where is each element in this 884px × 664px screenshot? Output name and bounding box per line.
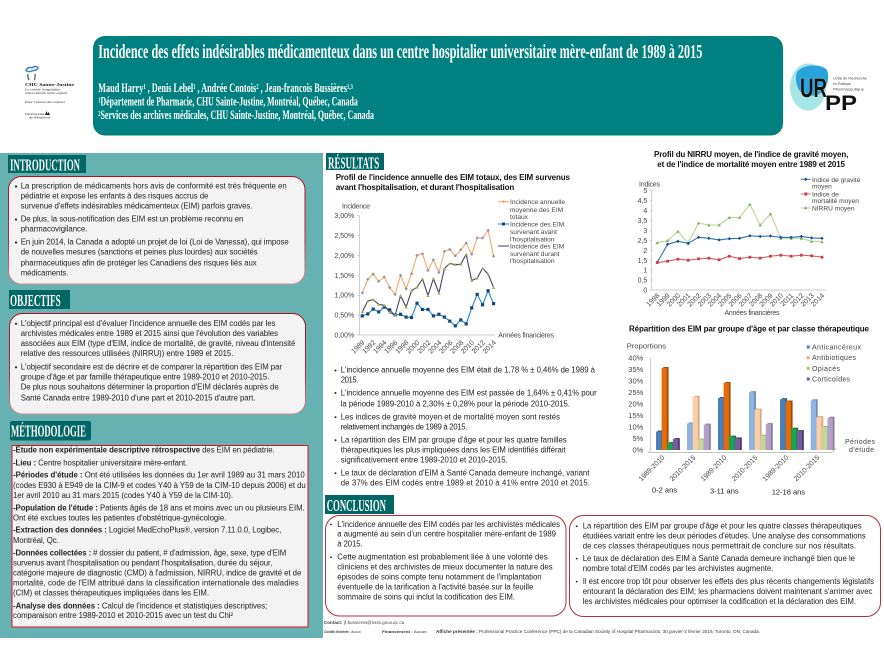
box: introduction text: La prescription de médicaments hors avis de conformité est très fréquente en — [21, 182, 287, 191]
axes and ticks: 2012 — [790, 292, 806, 308]
box: objectifs text: Santé Canada entre 1989-2010 d'une part et 2010-2015 d'autre part. — [21, 393, 255, 402]
axes and ticks: 2014 — [482, 339, 498, 355]
axes and ticks — [334, 204, 554, 355]
axes and ticks: 0% — [632, 446, 644, 455]
legend: survenant avant — [510, 229, 557, 236]
box: méthodologie text: -Lieu : Centre hospitalier universitaire mère-enfant. — [13, 459, 187, 468]
x axis period labels: 2010-2015 — [731, 454, 759, 483]
box: conclusion right: de ces classes thérapeutiques nous permettrait de conclure sur nos résultats. — [583, 542, 856, 551]
axes and ticks: 2004 — [427, 339, 443, 355]
legend: moyenne des EIM — [510, 207, 563, 214]
box: conclusion right: Le taux de déclaration des EIM à Santé Canada demeure inchangé bien que le — [583, 554, 855, 563]
axes and ticks: 2001 — [676, 292, 692, 308]
résultats bullet list: thérapeutiques les plus impliquées dans les EIM identifiés différait — [341, 446, 567, 455]
x axis period labels: 1989-2010 — [762, 454, 790, 483]
axes and ticks: 3 — [643, 228, 647, 235]
axes and ticks: 2,00% — [334, 253, 354, 260]
axes and ticks: 35% — [628, 365, 644, 374]
axes and ticks: 3,00% — [334, 213, 354, 220]
box: introduction text — [8, 176, 305, 284]
age group labels: 3-11 ans — [710, 486, 739, 496]
axes and ticks: 5% — [632, 434, 644, 443]
x axis period labels: 2010-2015 — [793, 454, 821, 483]
axes and ticks: 0,50% — [334, 313, 354, 320]
résultats bullet list: 2015. — [341, 376, 358, 385]
box: introduction text: pharmacovigilance. — [21, 225, 87, 234]
box: méthodologie text: Ont été exclues toutes les patientes d'obstétrique-gynécologie. — [13, 514, 226, 523]
bars: 12-18 ans 2010-2015 — [811, 399, 834, 450]
x axis period labels: 1989-2010 — [700, 454, 728, 483]
axes and ticks: 2005 — [717, 292, 733, 308]
heading: introduction: INTRODUCTION — [10, 156, 80, 175]
box: conclusion right: Il est encore trop tôt pour observer les effets des plus récents changements législatifs — [583, 577, 874, 586]
axes and ticks: Années financières — [498, 332, 554, 340]
logo: URPP — [790, 64, 867, 115]
axes and ticks — [638, 182, 826, 317]
authors and affiliations: Services des archives médicales, CHU Sainte-Justine, Montréal, Québec, Canada — [101, 108, 374, 122]
legend: l'hospitalisation — [510, 258, 555, 265]
axes and ticks: 5 — [643, 188, 647, 195]
box: conclusion left: épisodes de soins compte tenu notamment de l'implantation — [337, 573, 542, 582]
axes and ticks: 0,5 — [638, 278, 647, 284]
box: méthodologie text: -Population de l'étude : Patients âgés de 18 ans et moins avec un ou plusieurs EIM. — [13, 504, 305, 513]
axes and ticks: 15% — [628, 411, 644, 420]
logo: CHU Sainte-Justine: Pour l'amour des enfants — [24, 100, 66, 104]
panel: introduction — [8, 155, 305, 284]
résultats bullet list: Les indices de gravité moyen et de mortalité moyen sont restés — [341, 413, 560, 422]
legend: Indice de gravité — [812, 177, 861, 184]
authors and affiliations: Département de Pharmacie, CHU Sainte-Justine, Montréal, Québec, Canada — [100, 94, 358, 108]
chart: NIRRU, gravité, mortalité — [638, 150, 861, 317]
axes and ticks: 2009 — [759, 292, 775, 308]
box: conclusion left — [326, 516, 566, 616]
axes and ticks: 0,00% — [334, 332, 354, 340]
left column background — [0, 153, 323, 638]
line: incidence totale — [362, 230, 494, 294]
panel: méthodologie — [10, 421, 308, 627]
logo: URPP: Unité de Recherche — [833, 76, 867, 80]
box: introduction text: de nouvelles mesures (sanctions et peines plus lourdes) aux sociétés — [21, 248, 258, 257]
axes and ticks: 1996 — [383, 339, 399, 355]
box: conclusion right: La répartition des EIM par groupe d'âge et pour les quatre classes thérapeutiques — [583, 522, 862, 531]
logo: CHU Sainte-Justine: Université — [25, 112, 45, 116]
box: méthodologie text: -Périodes d'étude : Ont été utilisées les données du 1er avril 1989 au 31 mars 2010 — [13, 471, 305, 480]
box: conclusion right: nombre total d'EIM codés par les archivistes augmente. — [583, 564, 773, 573]
logo: CHU Sainte-Justine: Le centre hospitalier — [24, 88, 62, 92]
footer: contact and disclosures — [324, 620, 760, 634]
résultats bullet list — [334, 366, 597, 488]
axes and ticks: 20% — [628, 400, 644, 408]
legend: Indice de — [812, 192, 839, 198]
résultats bullet list: La répartition des EIM par groupe d'âge et pour les quatre familles — [341, 436, 567, 445]
bars: 3-11 ans 2010-2015 — [749, 391, 773, 450]
axes and ticks: 1994 — [372, 339, 388, 355]
axes and ticks: Indices — [639, 182, 660, 188]
axes and ticks: 2003 — [697, 292, 713, 308]
legend: survenant durant — [510, 251, 560, 258]
panel: objectifs — [9, 290, 306, 414]
authors and affiliations: 1 — [193, 83, 196, 91]
box: objectifs text: relative des ressources utilisées (NIRRU)) entre 1989 et 2015. — [21, 349, 233, 358]
axes and ticks: 2010 — [769, 292, 785, 308]
legend: Corticoïdes — [812, 376, 850, 384]
authors and affiliations — [98, 81, 374, 122]
box: introduction text: pharmaceutiques afin de protéger les Canadiens des risques liés aux — [21, 259, 257, 268]
box: conclusion right — [570, 516, 880, 616]
age group labels: 0-2 ans — [652, 486, 677, 494]
heading: objectifs: OBJECTIFS — [10, 291, 61, 310]
legend: Opiacés — [812, 366, 840, 373]
axes and ticks: 1989 — [350, 339, 366, 355]
footer: contact and disclosures: Contact: jf.bussieres@ssss.gouv.qc.ca — [324, 620, 405, 625]
legend: Antibiotiques — [812, 355, 856, 362]
box: conclusion left: Cette augmentation est probablement liée à une volonté des — [337, 553, 548, 562]
box: objectifs text: archivistes médicales entre 1989 et 2015 ainsi que l'évolution des variables — [21, 329, 278, 338]
line: indice de gravité moyen — [657, 236, 822, 262]
résultats bullet list: L'incidence annuelle moyenne des EIM est passée de 1,64% ± 0,41% pour — [341, 388, 597, 397]
line: indice de mortalité moyen — [657, 255, 822, 263]
box: conclusion left: éventuelle de la tarification à l'activité basée sur la feuille — [337, 583, 533, 592]
heading: conclusion — [325, 495, 394, 515]
legend: Anticancéreux — [812, 344, 862, 352]
logo: CHU Sainte-Justine: de Montréal — [29, 116, 50, 120]
chart title: Répartition des EIM par groupe d'âge et par classe thérapeutique — [629, 324, 870, 334]
logo: CHU Sainte-Justine: CHU Sainte-Justine — [25, 82, 74, 87]
axes and ticks: 2,5 — [638, 238, 647, 245]
axes and ticks: 2 — [643, 248, 647, 255]
box: objectifs text: groupe d'âge et par famille thérapeutique entre 1989-2010 et 2010-2015. — [21, 373, 269, 382]
box: méthodologie text: -Données collectées : # dossier du patient, # d'admission, âge, sexe, type d'EIM — [13, 549, 286, 558]
box: objectifs text — [10, 314, 306, 414]
logo: URPP: PP — [825, 92, 857, 115]
axes and ticks: 10% — [628, 423, 644, 432]
axes and ticks: 1,00% — [334, 293, 354, 300]
bars: 12-18 ans 1989-2010 — [780, 398, 804, 450]
axes and ticks: 4 — [643, 208, 647, 215]
legend — [801, 177, 861, 212]
axes and ticks: 2014 — [810, 292, 826, 308]
authors and affiliations: 1 — [143, 83, 146, 91]
résultats bullet list: L'incidence annuelle moyenne des EIM était de 1,78 % ± 0,46% de 1989 à — [341, 366, 596, 375]
axes and ticks: 1992 — [361, 339, 377, 355]
box: objectifs text: De plus nous souhaitons déterminer la proportion d'EIM déclarés auprès de — [21, 383, 279, 392]
legend: Incidence des EIM — [510, 244, 564, 250]
heading: méthodologie: MÉTHODOLOGIE — [11, 422, 86, 441]
authors and affiliations: 2 — [98, 110, 101, 118]
line: incidence durant hospitalisation — [362, 254, 494, 315]
axes and ticks: 1998 — [645, 292, 661, 308]
box: méthodologie text: -Analyse des données : Calcul de l'incidence et statistiques descriptives; — [13, 602, 267, 611]
axes and ticks: 2002 — [416, 339, 432, 355]
footer: contact and disclosures: Conflit d'intérêt : Aucun — [324, 630, 361, 634]
bars: 0-2 ans 1989-2010 — [656, 367, 680, 450]
axes and ticks: 2004 — [707, 292, 723, 308]
box: conclusion left: sommaire de soins qui inclut la codification des EIM. — [337, 593, 515, 602]
footer: contact and disclosures: Financement : Aucun — [382, 630, 427, 634]
footer: contact and disclosures: Affiche présentée : Professional Practice Conference (PPC) de la Canadian Society of Hospital Pharmacists, 30 janvier-3 février 2016, Toronto, ON, Canada. — [436, 629, 760, 634]
box: méthodologie text: (codes E930 à E949 de la CIM-9 et codes Y40 à Y59 de la CIM-10 depuis 2006) et du — [13, 481, 306, 490]
box: introduction text: pédiatrie et expose les enfants à des risques accrus de — [21, 192, 208, 201]
axes and ticks — [627, 342, 837, 455]
box: conclusion right: les archivistes médicales pour optimiser la codification et la déclaration des EIM. — [583, 597, 856, 606]
box: introduction text: De plus, la sous-notification des EIM est un problème reconnu en — [21, 215, 243, 224]
axes and ticks: 4,5 — [638, 198, 647, 205]
axes and ticks: 1998 — [394, 339, 410, 355]
axes and ticks: 1,50% — [334, 273, 354, 280]
authors and affiliations: 2 — [256, 83, 259, 91]
résultats bullet list: significativement entre 1989-2010 et 2010-2015. — [341, 456, 508, 465]
heading: résultats: RÉSULTATS — [328, 153, 379, 172]
chart: répartition par âge et classe thérapeutique — [627, 324, 876, 496]
heading: introduction — [8, 155, 86, 175]
legend: mortalité moyen — [812, 198, 859, 205]
box: introduction text: médicaments. — [21, 269, 68, 278]
box: objectifs text: associées aux EIM (type d'EIM, indice de mortalité, de gravité, niveau d'intensité — [21, 339, 295, 348]
box: conclusion left: à 2015. — [337, 540, 363, 549]
axes and ticks: 2006 — [728, 292, 744, 308]
axes and ticks: 30% — [628, 376, 644, 385]
age group labels — [652, 486, 805, 496]
box: objectifs text: L'objectif principal est d'évaluer l'incidence annuelle des EIM codés par les — [21, 319, 275, 328]
axes and ticks: 1 — [643, 268, 647, 275]
box: méthodologie text — [12, 446, 308, 627]
axes and ticks: Incidence — [342, 204, 370, 210]
axes and ticks: 2,50% — [334, 233, 354, 240]
line: incidence avant hospitalisation — [362, 291, 494, 326]
authors and affiliations: 1,3 — [347, 83, 353, 91]
legend — [498, 199, 565, 265]
chart: incidence annuelle — [334, 173, 571, 355]
legend: NIRRU moyen — [812, 206, 855, 212]
axes and ticks: 2007 — [738, 292, 754, 308]
legend — [807, 344, 862, 384]
axes and ticks: 2013 — [800, 292, 816, 308]
authors and affiliations: 1 — [98, 96, 101, 104]
legend: Incidence annuelle — [510, 199, 565, 206]
authors and affiliations: , Andrée Contois — [195, 81, 256, 95]
line: NIRRU moyen — [657, 204, 822, 243]
authors and affiliations: , Jean-francois Bussières — [259, 81, 347, 95]
bars: 3-11 ans 1989-2010 — [718, 382, 742, 450]
age group labels: 12-18 ans — [772, 488, 805, 496]
axes and ticks: 2000 — [666, 292, 682, 308]
axes and ticks: 25% — [628, 388, 644, 397]
résultats bullet list: la période 1989-2010 à 2,30% ± 0,28% pour la période 2010-2015. — [341, 400, 570, 409]
authors and affiliations: Maud Harry — [98, 81, 167, 95]
logo: URPP: en Pratique — [833, 82, 851, 86]
box: méthodologie text: mortalité, code de l'EIM attribué dans la classification internationale des maladies — [13, 579, 299, 588]
axes and ticks: Années financières — [724, 310, 780, 317]
axes and ticks: 2006 — [438, 339, 454, 355]
axes and ticks: 0 — [643, 288, 647, 294]
box: méthodologie text: (CIM) et classes thérapeutiques impliquées dans les EIM. — [13, 589, 209, 598]
axes and ticks: Proportions — [627, 342, 666, 350]
logo: CHU Sainte-Justine — [24, 66, 74, 120]
axis label: périodes d'étude: Périodes — [845, 439, 876, 446]
box: conclusion right: entourant la déclaration des EIM; les pharmaciens doivent maintenant s'arrimer avec — [583, 587, 872, 596]
résultats bullet list: relativement inchangés de 1989 à 2015. — [341, 422, 467, 431]
authors and affiliations: , Denis Lebel — [146, 81, 193, 95]
box: méthodologie text: -Extraction des données : Logiciel MedEchoPlus®, version 7.11.0.0, Logibec, — [13, 526, 281, 535]
box: méthodologie text: 1er avril 2010 au 31 mars 2015 (codes Y40 à Y59 de la CIM-10). — [13, 491, 233, 500]
legend: Incidence des EIM — [510, 222, 564, 228]
box: conclusion left: a augmenté au sein d'un centre hospitalier mère-enfant de 1989 — [337, 530, 556, 539]
bars: 0-2 ans 2010-2015 — [687, 396, 711, 450]
axes and ticks: 2000 — [405, 339, 421, 355]
chart title: avant l'hospitalisation, et durant l'hospitalisation — [336, 183, 514, 192]
axes and ticks: 2002 — [687, 292, 703, 308]
chart title: Profil du NIRRU moyen, de l'indice de gravité moyen, — [654, 150, 848, 159]
x axis period labels: 1989-2010 — [638, 454, 666, 483]
chart title: Profil de l'incidence annuelle des EIM totaux, des EIM survenus — [336, 173, 571, 182]
box: objectifs text: L'objectif secondaire est de décrire et de comparer la répartition des EIM par — [21, 363, 282, 372]
heading: résultats — [326, 153, 384, 172]
résultats bullet list: de 37% des EIM codés entre 1989 et 2010 à 41% entre 2010 et 2015. — [341, 479, 590, 488]
logo: CHU Sainte-Justine: universitaire mère-enfant — [25, 91, 68, 95]
legend: totaux — [510, 214, 529, 221]
logo: URPP: Pharmaceutique — [833, 88, 864, 92]
x axis period labels — [638, 454, 821, 483]
panel: conclusion — [325, 495, 880, 616]
box: méthodologie text: comparaison entre 1989-2010 et 2010-2015 avec un test du Chi² — [13, 611, 233, 620]
box: conclusion left: L'incidence annuelle des EIM codés par les archivistes médicales — [337, 520, 560, 529]
axes and ticks: 2012 — [471, 339, 487, 355]
title banner — [93, 36, 783, 136]
heading: conclusion: CONCLUSION — [327, 496, 386, 515]
axes and ticks: 1,5 — [638, 258, 647, 265]
résultats bullet list: Le taux de déclaration d'EIM à Santé Canada demeure inchangé, variant — [341, 469, 590, 478]
heading: méthodologie — [10, 421, 91, 441]
axes and ticks: 3,5 — [638, 218, 647, 225]
axes and ticks: 40% — [628, 353, 644, 362]
box: conclusion right: étudiées variait entre les deux périodes d'études. Une analyse des consommations — [583, 532, 866, 541]
chart title — [336, 173, 571, 192]
box: méthodologie text: -Étude non expérimentale descriptive rétrospective des EIM en pédiatrie. — [13, 446, 275, 455]
box: conclusion left: cliniciens et des archivistes de mieux documenter la nature des — [337, 563, 553, 572]
axes and ticks: 2008 — [449, 339, 465, 355]
box: méthodologie text: Montréal, Qc. — [13, 536, 59, 545]
axis label: périodes d'étude — [845, 439, 876, 454]
logo: URPP: UR — [800, 73, 827, 103]
legend: moyen — [812, 184, 832, 190]
box: méthodologie text: catégorie majeure de diagnostic (CMD) à l'admission, NIRRU, indice de gravité et de — [13, 569, 301, 578]
axes and ticks: 2011 — [780, 292, 795, 308]
chart title — [654, 150, 848, 169]
box: introduction text: survenue d'effets indésirables médicamenteux (EIM) parfois graves. — [21, 202, 252, 211]
box: introduction text: En juin 2014, la Canada a adopté un projet de loi (Loi de Vanessa), qui impose — [21, 238, 289, 247]
box: méthodologie text: survenus avant l'hospitalisation ou pendant l'hospitalisation, durée du séjour, — [13, 559, 272, 568]
axis label: périodes d'étude: d'étude — [849, 447, 874, 454]
x axis period labels: 2010-2015 — [669, 454, 697, 483]
axes and ticks: 2010 — [460, 339, 476, 355]
axes and ticks: 2008 — [748, 292, 764, 308]
chart title: et de l'indice de mortalité moyen entre 1989 et 2015 — [657, 160, 846, 169]
heading: objectifs — [9, 290, 70, 310]
axes and ticks: 1999 — [656, 292, 672, 308]
legend: l'hospitalisation — [510, 236, 555, 244]
